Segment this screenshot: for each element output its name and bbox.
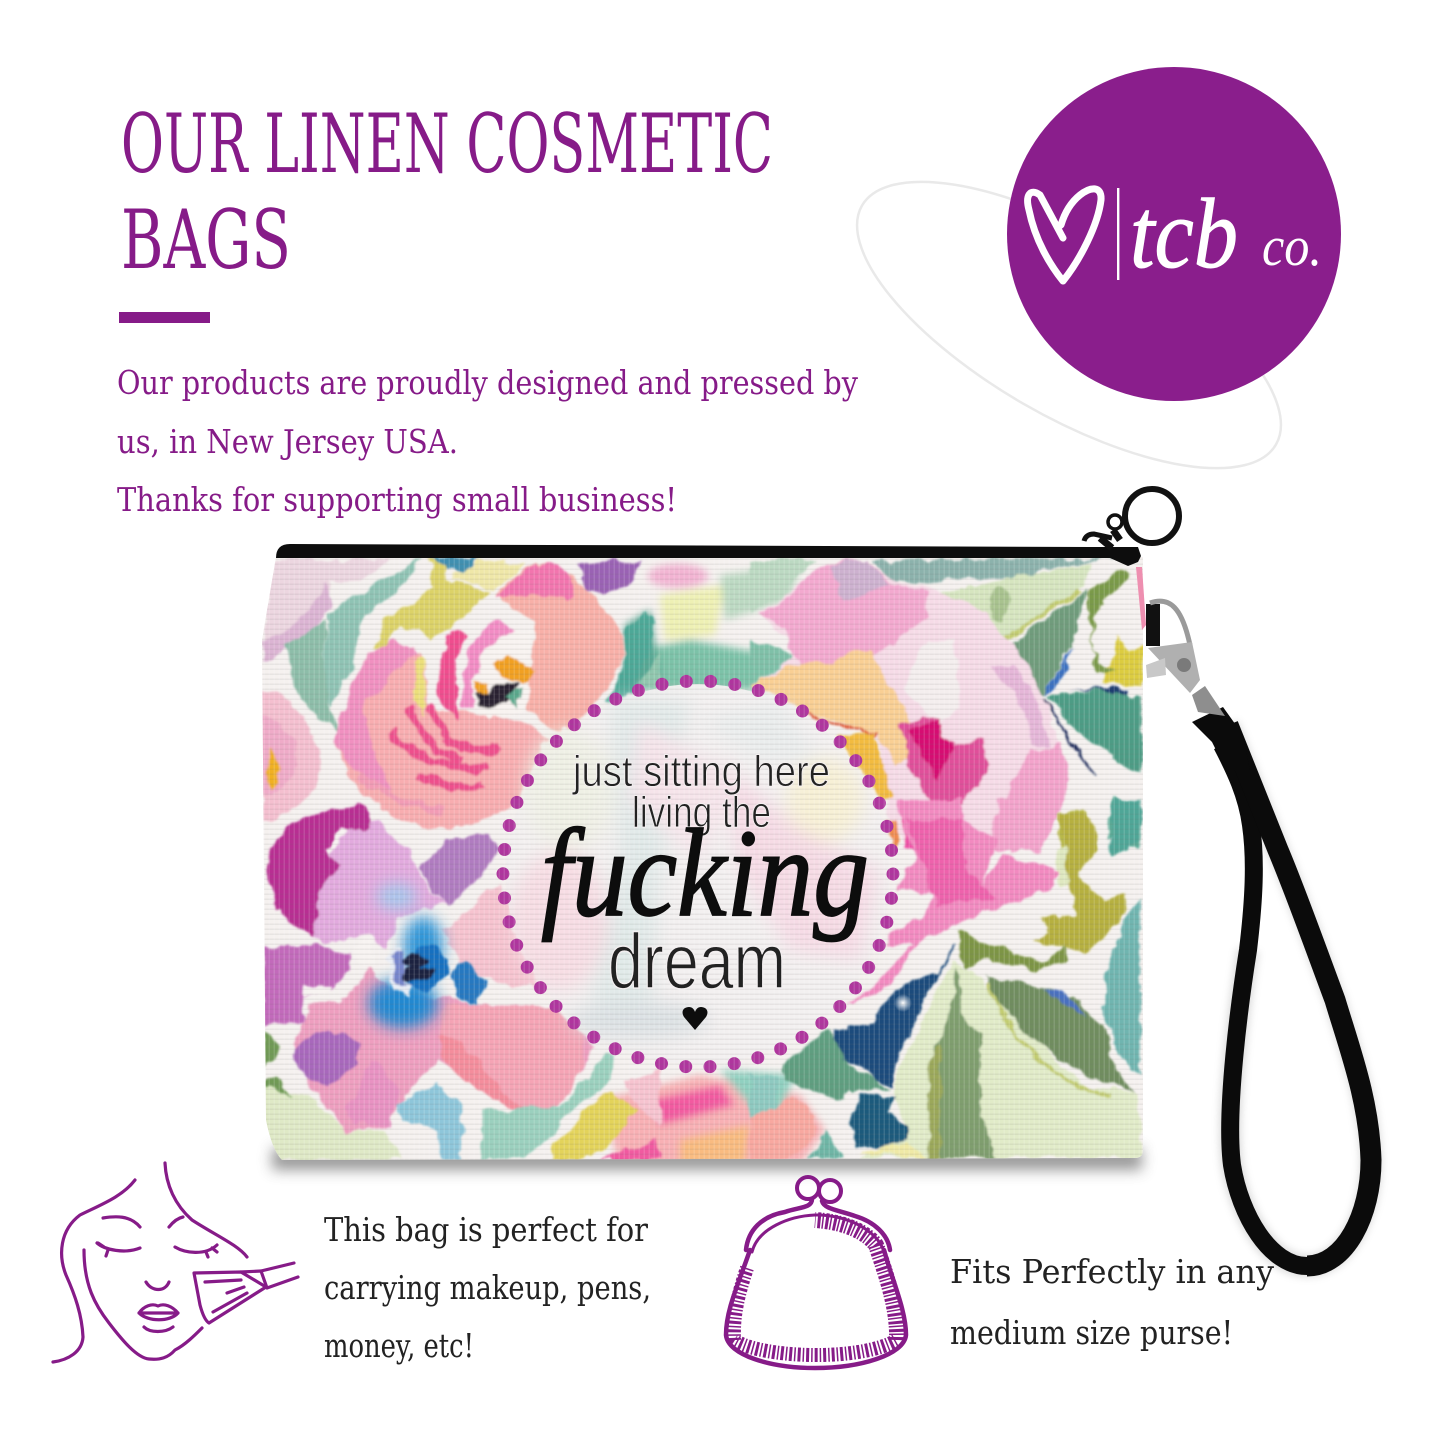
linen texture: [255, 550, 1155, 1170]
title: BAGS: [121, 194, 291, 288]
upper-right quadrant: peony and leaves: [750, 558, 1143, 850]
text: fits in purse: [950, 1252, 1274, 1352]
text: carrying uses: carrying makeup, pens,: [324, 1268, 651, 1307]
title: OUR LINEN COSMETIC: [121, 98, 773, 192]
center top and bottom foliage: [600, 564, 825, 1165]
logo badge: [1007, 67, 1341, 401]
lens glint: [894, 994, 912, 1012]
cosmetic bag: [255, 544, 1155, 1170]
text: carrying uses: This bag is perfect for: [324, 1210, 648, 1249]
blue watercolor wash: [368, 883, 443, 1028]
bag message: [541, 747, 869, 1030]
intro text block: [117, 363, 858, 519]
wrist strap: [1192, 707, 1371, 1266]
purse hatching: [734, 1268, 897, 1355]
title: [121, 98, 773, 288]
intro text block: Thanks for supporting small business!: [117, 480, 677, 519]
title underline bar: [119, 312, 210, 323]
lower-right quadrant: navy and green leaves: [750, 800, 1143, 1158]
icon: coin purse: [726, 1177, 906, 1368]
intro text block: us, in New Jersey USA.: [117, 422, 458, 461]
logo wordmark: co.: [1262, 216, 1322, 278]
bag message: just sitting here: [571, 747, 830, 796]
logo wordmark: [1130, 178, 1322, 289]
pink side seam: [1136, 567, 1146, 630]
dotted ring: [503, 681, 893, 1067]
lower-left quadrant: purple and blue flower: [260, 807, 660, 1160]
makeup brush: [194, 1272, 266, 1323]
bag message: living the: [632, 788, 771, 837]
text: fits in purse: Fits Perfectly in any: [950, 1252, 1274, 1291]
swivel clasp: [1146, 601, 1225, 716]
intro text block: Our products are proudly designed and pressed by: [117, 363, 858, 402]
bag message: fucking: [541, 805, 869, 943]
icon: face with makeup brush: [53, 1163, 298, 1362]
bag shadow: [272, 1148, 1142, 1170]
logo wordmark: tcb: [1130, 178, 1238, 289]
icon: logo heart: [1028, 189, 1101, 281]
decorative orbit ring: [817, 127, 1321, 523]
text: fits in purse: medium size purse!: [950, 1313, 1233, 1352]
zipper: [276, 544, 1141, 566]
logo divider: [1117, 188, 1119, 280]
text: carrying uses: money, etc!: [324, 1326, 474, 1365]
floral print: [255, 550, 1155, 1170]
bag message: dream: [608, 917, 786, 1005]
center medallion: [506, 684, 890, 1064]
text: carrying uses: [324, 1210, 651, 1365]
zipper pull and ring: [1084, 489, 1179, 548]
top-left quadrant: rose and foliage: [260, 558, 660, 829]
icon: small heart: [683, 1007, 707, 1030]
